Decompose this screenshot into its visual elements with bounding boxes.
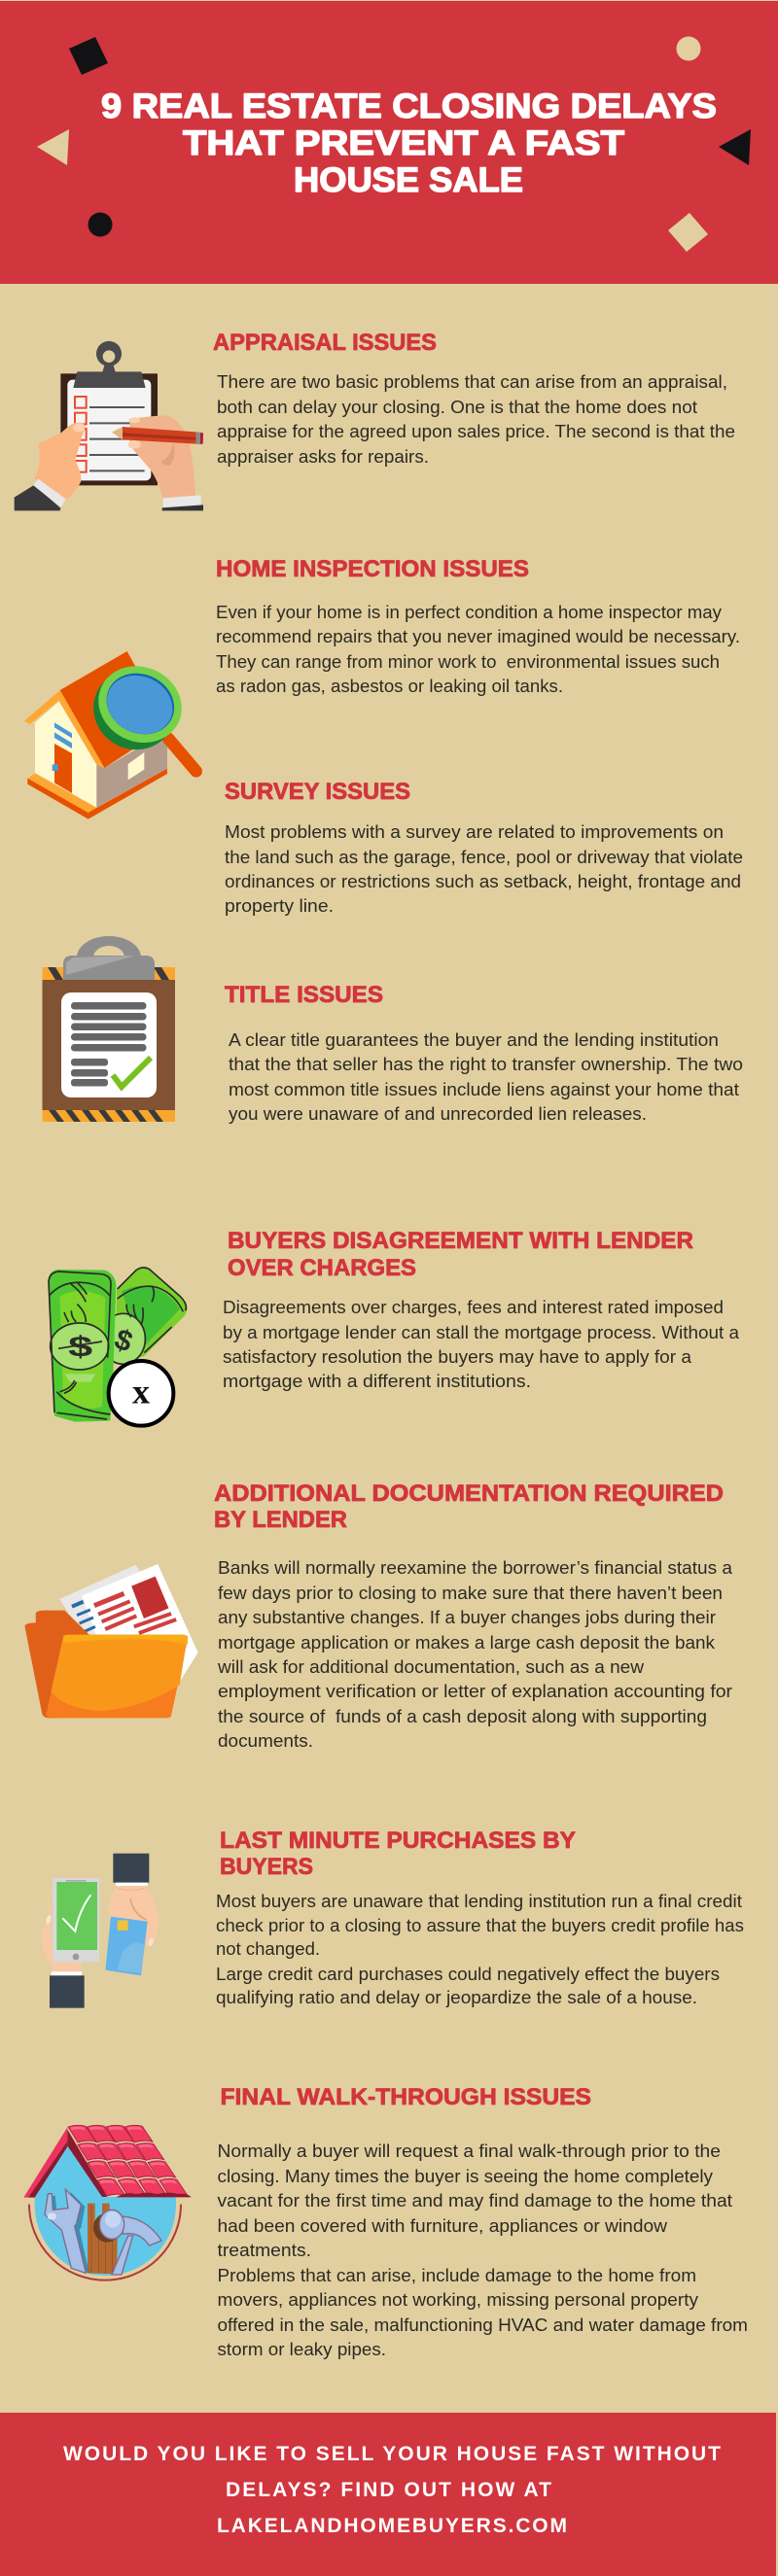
text: appraisal body: both can delay your closing. One is that the home does not [217,398,697,417]
text: additional documentation body: Banks will normally reexamine the borrower’s financial status a [218,1558,733,1578]
heading: title issues: TITLE ISSUES [225,982,383,1008]
panel: buyers disagreement with lender [48,1228,740,1426]
text: survey body: property line. [225,896,334,916]
text: buyers disagreement body: satisfactory resolution the buyers may have to apply for a [223,1347,692,1367]
text: final walk-through body: Normally a buyer will request a final walk-through prior to the [218,2141,721,2161]
footer banner [0,2413,776,2576]
heading: final walk-through issues: FINAL WALK-THROUGH ISSUES [220,2084,591,2110]
text: final walk-through body: vacant for the first time and may find damage to the home that [218,2191,732,2210]
text: additional documentation body: will ask for additional documentation, such as a new [217,1657,645,1677]
title: 9 REAL ESTATE CLOSING DELAYS [101,87,717,125]
text: additional documentation body: employment verification or letter of explanation accounting for [218,1682,732,1701]
decorative shape: tan triangle [37,129,69,165]
text: home inspection body: They can range from minor work to environmental issues such [216,652,720,672]
text: survey body: the land such as the garage, fence, pool or driveway that violate [225,848,743,867]
text: home inspection body: recommend repairs that you never imagined would be necessary. [216,627,740,646]
icon: house with magnifying glass [24,651,196,819]
decorative shape: black circle [88,212,113,237]
text: buyers disagreement body: Disagreements over charges, fees and interest rated imposed [223,1298,724,1317]
text: final walk-through body: had been covered with furniture, appliances or window [218,2216,668,2236]
decorative shape: black rhombus [69,37,108,75]
panel: last minute purchases [42,1828,744,2008]
text: last minute purchases body [216,1892,744,2007]
heading: additional documentation: BY LENDER [214,1507,347,1533]
text: final walk-through body: Problems that can arise, include damage to the home from [218,2266,696,2285]
call to action text: DELAYS? FIND OUT HOW AT [226,2479,551,2501]
title: HOUSE SALE [294,160,523,199]
heading: home inspection issues: HOME INSPECTION ISSUES [216,556,529,582]
text: survey body: Most problems with a survey are related to improvements on [225,822,724,842]
heading: appraisal issues: APPRAISAL ISSUES [213,330,437,356]
heading: last minute purchases: LAST MINUTE PURCHASES BY [220,1828,576,1854]
text: title body [229,1030,743,1124]
text: survey body [225,822,743,916]
text: title body: you were unaware of and unrecorded lien releases. [229,1104,647,1124]
text: additional documentation body: documents. [218,1731,313,1751]
text: additional documentation body: the source of funds of a cash deposit along with supporting [218,1707,707,1726]
text: title body: A clear title guarantees the buyer and the lending institution [229,1030,719,1050]
heading: survey issues: SURVEY ISSUES [225,779,410,805]
decorative shape: tan circle [677,37,700,60]
icon: dollar bills with x badge: x [132,1372,150,1410]
icon: dollar bills with x badge [48,1268,188,1426]
header banner [0,1,778,284]
text: final walk-through body: storm or leaky pipes. [218,2340,386,2359]
text: final walk-through body: movers, appliances not working, missing personal property [218,2290,698,2310]
title: THAT PREVENT A FAST [183,123,624,162]
call to action text [63,2443,721,2537]
text: appraisal body [217,372,735,467]
heading: buyers disagreement [228,1228,693,1281]
text: last minute purchases body: Most buyers are unaware that lending institution run a final credit [216,1892,742,1911]
call to action text: WOULD YOU LIKE TO SELL YOUR HOUSE FAST WITHOUT [63,2443,721,2465]
text: survey body: ordinances or restrictions such as setback, height, frontage and [225,872,741,891]
decorative shape: black triangle [719,129,751,165]
panel: title issues [43,936,743,1124]
text: last minute purchases body: Large credit card purchases could negatively effect the buyers [216,1965,720,1984]
text: final walk-through body: offered in the sale, malfunctioning HVAC and water damage from [218,2315,748,2335]
icon: title document clipboard [43,936,175,1122]
text: home inspection body [216,603,740,696]
text: final walk-through body: treatments. [218,2241,311,2260]
text: buyers disagreement body: by a mortgage lender can stall the mortgage process. Without a [223,1323,740,1342]
text: additional documentation body: few days prior to closing to make sure that there haven’t been [218,1584,723,1603]
text: buyers disagreement body [223,1298,740,1391]
text: last minute purchases body: qualifying ratio and delay or jeopardize the sale of a house. [216,1988,697,2007]
text: appraisal body: appraiser asks for repairs. [217,447,429,467]
text: home inspection body: Even if your home is in perfect condition a home inspector may [216,603,722,622]
icon: dollar bills with x badge: $ [68,1331,92,1363]
text: additional documentation body: any substantive changes. If a buyer changes jobs during their [218,1608,716,1627]
panel: appraisal issues [15,330,735,510]
heading: last minute purchases: BUYERS [220,1854,313,1880]
text: last minute purchases body: not changed. [216,1939,320,1959]
panel: additional documentation [25,1480,733,1751]
heading: additional documentation [214,1480,724,1533]
panel: home inspection issues [24,556,740,819]
heading: additional documentation: ADDITIONAL DOCUMENTATION REQUIRED [214,1480,724,1507]
text: home inspection body: as radon gas, asbestos or leaking oil tanks. [216,677,563,696]
text: buyers disagreement body: mortgage with a different institutions. [223,1372,531,1391]
decorative shape: tan diamond [668,213,708,252]
text: final walk-through body [218,2141,748,2359]
icon: folder with documents [25,1564,198,1718]
text: title body: that the that seller has the right to transfer ownership. The two [229,1055,743,1074]
title [101,87,717,199]
icon: house roof with tools [23,2125,192,2280]
call to action text: LAKELANDHOMEBUYERS.COM [217,2515,567,2537]
heading: last minute purchases [220,1828,576,1880]
heading: buyers disagreement: BUYERS DISAGREEMENT WITH LENDER [228,1228,693,1254]
text: additional documentation body [217,1558,733,1751]
panel: survey issues [225,779,743,916]
panel: final walk-through issues [23,2084,748,2359]
text: additional documentation body: mortgage application or makes a large cash deposit the bank [218,1633,716,1653]
text: final walk-through body: closing. Many times the buyer is seeing the home completely [218,2167,713,2186]
text: appraisal body: There are two basic problems that can arise from an appraisal, [217,372,727,392]
icon: clipboard with hands and pencil [15,341,203,510]
icon: hands with phone and credit card [42,1854,158,2008]
text: title body: most common title issues include liens against your home that [229,1080,739,1099]
heading: buyers disagreement: OVER CHARGES [228,1255,416,1281]
icon: dollar bills with x badge: $ [110,1323,137,1359]
text: appraisal body: appraise for the agreed upon sales price. The second is that the [217,422,735,441]
text: last minute purchases body: check prior to a closing to assure that the buyers credit profile has [216,1916,744,1935]
